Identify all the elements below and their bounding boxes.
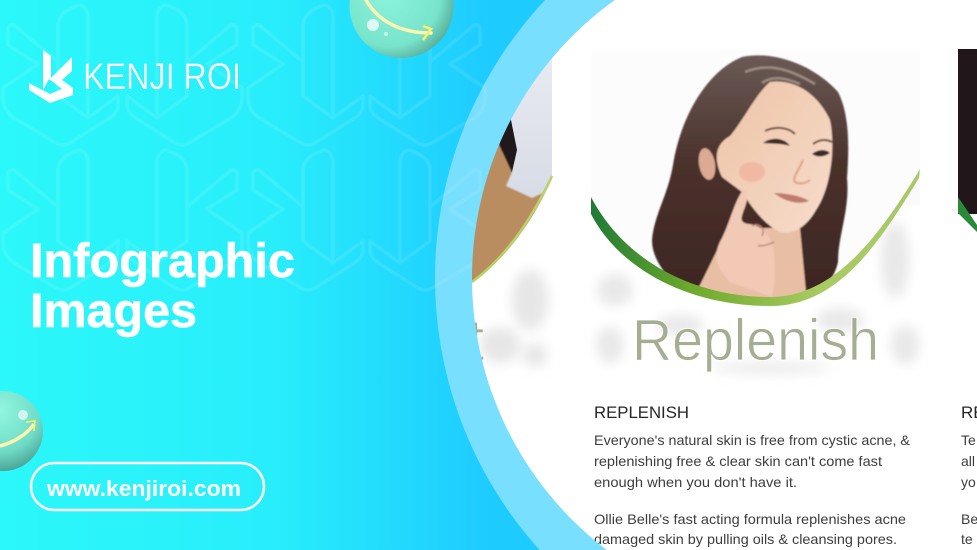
ear — [698, 147, 716, 181]
copy: replenish: damaged skin by pulling oils & cleansing pores. — [594, 531, 897, 547]
eyes — [763, 139, 790, 146]
title: Infographic — [30, 235, 295, 288]
hair — [652, 55, 848, 300]
right photo — [958, 49, 977, 214]
left product column — [468, 50, 552, 373]
copy: replenish: replenishing free & clear skin can't come fast — [594, 453, 882, 469]
white circle panel — [460, 0, 977, 550]
title: Images — [30, 285, 197, 338]
hand — [716, 190, 775, 297]
copy: right column fragment: Te — [961, 432, 976, 448]
copy: right column fragment — [961, 403, 977, 547]
face — [717, 81, 832, 233]
right arc — [958, 197, 977, 232]
copy heading: REPLENISH — [594, 403, 689, 422]
right product column — [958, 49, 977, 232]
title — [30, 235, 295, 338]
website pill: www.kenjiroi.com — [46, 476, 241, 501]
centre product photo — [591, 50, 920, 375]
mouth — [774, 193, 809, 203]
woman portrait — [650, 54, 850, 297]
marble texture — [596, 222, 919, 373]
sphere: top — [350, 0, 454, 58]
logo wordmark: KENJI ROI — [83, 56, 241, 97]
left arc — [472, 176, 552, 282]
nose — [794, 160, 810, 183]
left marble — [480, 270, 548, 367]
copy: replenish: enough when you don't have it. — [594, 474, 797, 490]
hair parting highlight — [745, 68, 815, 84]
copy: right column fragment: yo — [961, 474, 976, 490]
left heading fragment: t — [468, 308, 484, 373]
Replenish script heading: Replenish — [632, 308, 879, 373]
green arc band — [591, 169, 920, 306]
sphere: left — [0, 391, 43, 471]
copy: replenish: Everyone's natural skin is free from cystic acne, & — [594, 432, 911, 448]
logo — [29, 50, 241, 103]
copy: right column fragment: all — [961, 453, 975, 469]
left photo — [470, 50, 552, 290]
logo icon — [29, 50, 73, 103]
copy: replenish — [594, 403, 911, 547]
copy: replenish: Ollie Belle's fast acting formula replenishes acne — [594, 511, 906, 527]
copy: right column fragment: te — [961, 531, 973, 547]
cheek — [739, 162, 765, 182]
light ring — [435, 0, 977, 550]
watermark pattern — [3, 5, 485, 290]
neck and chest — [698, 226, 807, 297]
website pill — [31, 463, 264, 510]
